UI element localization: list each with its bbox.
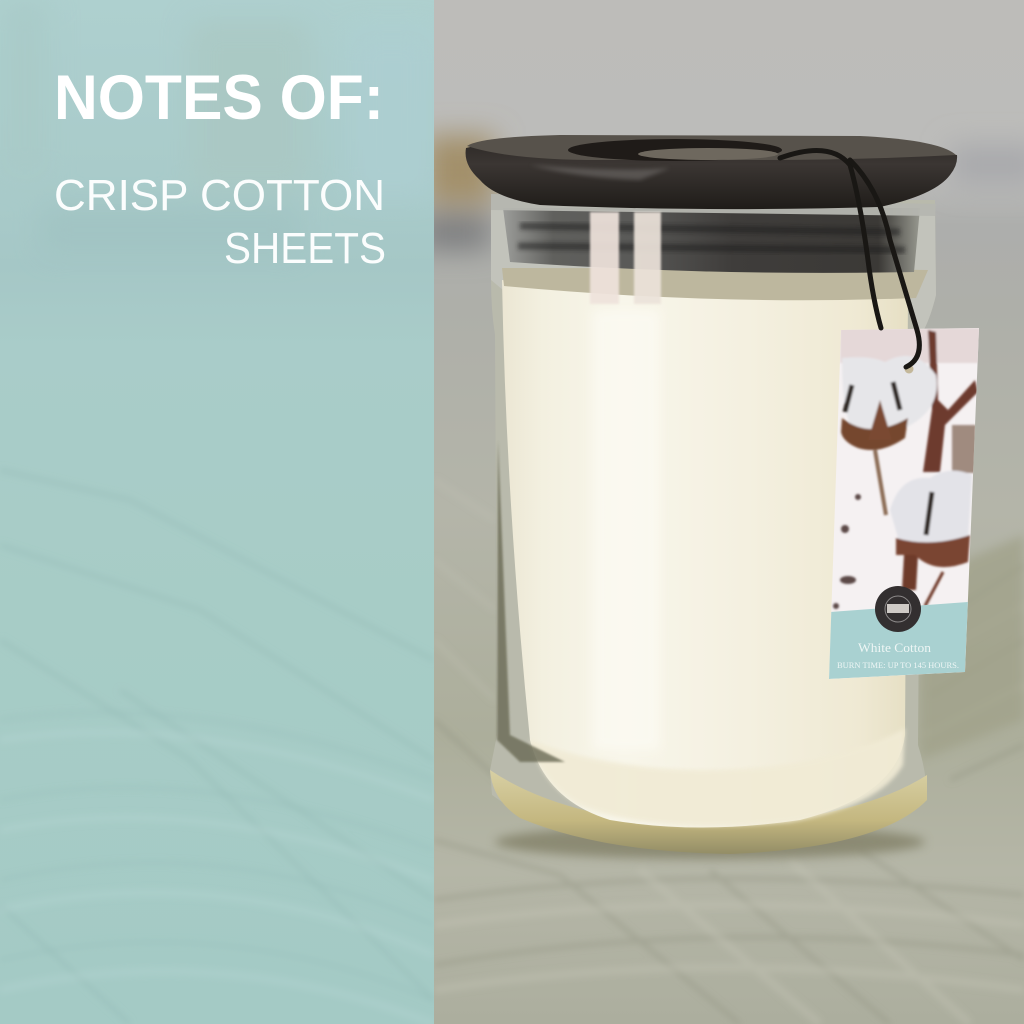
panel: photo of candle on bedding — [420, 0, 1024, 1024]
panel: teal text overlay — [43, 50, 432, 1000]
cotton boll bottom — [890, 471, 972, 545]
glass base — [490, 770, 927, 854]
tag name: White Cotton — [858, 641, 932, 655]
right side olive fold — [920, 535, 1024, 760]
inner lid band — [503, 208, 920, 273]
heading: NOTES OF: — [54, 63, 384, 133]
black tag string — [780, 150, 919, 367]
hang tag — [829, 328, 980, 679]
tag burn time: BURN TIME: UP TO 145 HOURS. — [837, 661, 959, 670]
quilted sheet texture — [0, 470, 434, 1024]
candle shadow — [495, 825, 925, 859]
tag hole — [904, 366, 914, 374]
wax top surface seen through glass — [502, 268, 928, 300]
jar glass body — [490, 280, 925, 810]
brand seal — [875, 586, 921, 632]
cotton boll top — [842, 356, 939, 431]
stem — [923, 330, 978, 472]
left glass dark edge — [497, 440, 565, 762]
tag photo area — [829, 328, 979, 679]
wax highlight — [600, 318, 652, 742]
glass rim — [491, 194, 936, 216]
blurred buds — [833, 494, 861, 609]
background blurred headboard — [420, 135, 1024, 250]
lid recess — [568, 139, 782, 161]
lid top surface — [467, 135, 956, 160]
subheading — [56, 180, 384, 264]
lid side — [466, 140, 957, 209]
glass upper clear area — [491, 210, 936, 335]
subheading line 2: SHEETS — [224, 224, 386, 273]
wax fill — [502, 280, 908, 828]
candle jar — [466, 135, 957, 854]
quilted bedding texture — [443, 846, 1022, 982]
lid sheen — [530, 165, 670, 180]
window reflections — [590, 212, 619, 304]
tag teal band — [829, 602, 968, 679]
subheading line 1: CRISP COTTON — [54, 171, 385, 220]
lid — [466, 135, 957, 209]
wax bottom shadow — [530, 728, 905, 826]
blurred background tones — [208, 39, 292, 100]
